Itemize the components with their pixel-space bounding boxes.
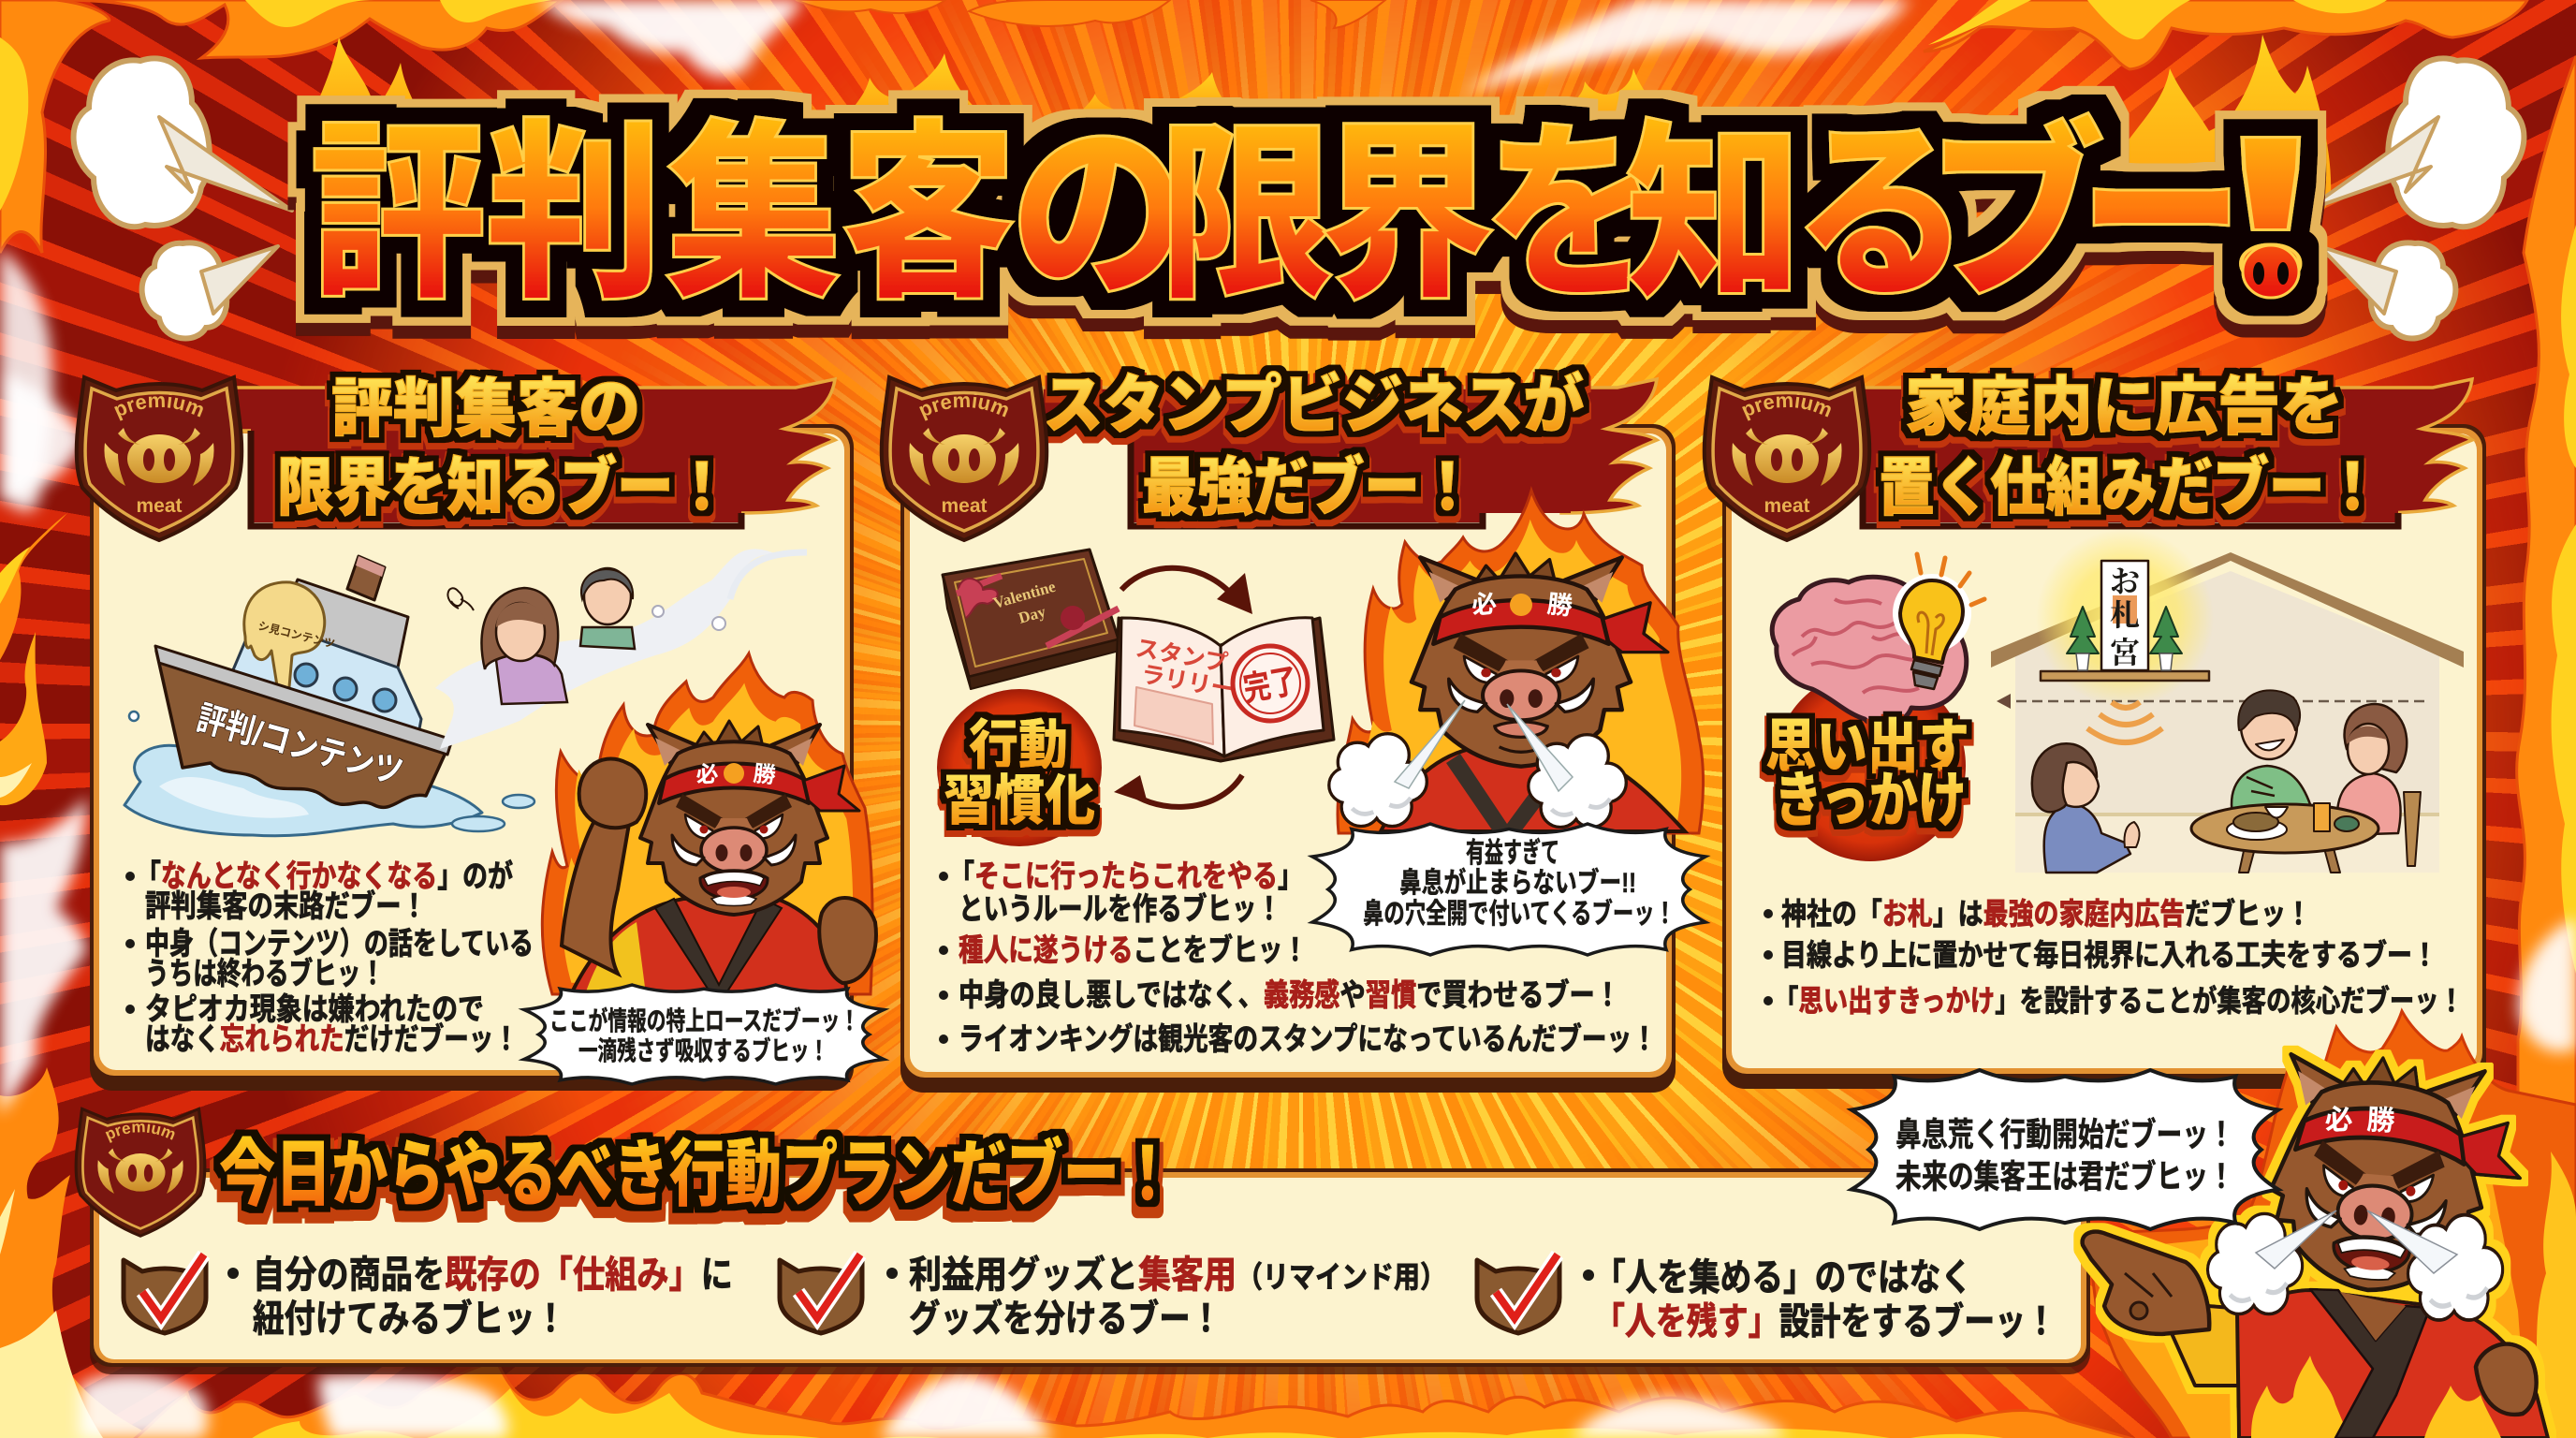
action plan card <box>90 1168 2090 1374</box>
illustration: valentine chocolate box: Day <box>1017 602 1048 627</box>
ofuda: 宮 <box>2110 636 2140 669</box>
illustration: stamp rally book <box>1114 618 1334 761</box>
illustration: sinking ship: シ見コンテンツ <box>256 619 336 651</box>
badge: premium meat: meat <box>941 495 988 517</box>
badge: premium meat: meat <box>136 495 183 517</box>
badge: premium meat: premium <box>919 395 1008 421</box>
illustration: stamp rally book: スタンプ <box>1134 635 1230 677</box>
steam: left <box>2207 1213 2303 1314</box>
badge: premium meat: premium <box>114 395 203 421</box>
panel 1 banner: 限界を知るブー！ <box>277 452 730 523</box>
panel 2 banner: 最強だブー！ <box>1142 452 1475 523</box>
character: angry boar with raised fist <box>542 653 876 994</box>
steam: right <box>2408 1215 2503 1320</box>
bullets: panel 1: はなく忘れられただけだブーッ！ <box>145 1021 519 1056</box>
speech bubble: action plan <box>1852 1070 2278 1229</box>
panel 1: reputation limits <box>75 369 921 1091</box>
icon: check <box>1477 1255 1559 1333</box>
person: woman at left <box>2032 743 2140 873</box>
speech bubble: panel 1 <box>524 985 884 1084</box>
bullets: panel 2: 中身の良し悪しではなく、義務感や習慣で買わせるブー！ <box>959 977 1620 1012</box>
arrow: book to habit <box>1114 775 1242 807</box>
action 2: グッズを分けるブー！ <box>909 1299 1222 1340</box>
speech bubble: panel 1: 一滴残さず吸収するブヒッ！ <box>578 1035 828 1065</box>
panel 1 card <box>90 424 854 1091</box>
flames: right edge <box>2517 56 2576 1438</box>
illustration: brain, bulb, remember trigger: きっかけ <box>1774 767 1967 834</box>
title flames <box>301 35 2331 234</box>
steam clouds: title right <box>2305 58 2524 338</box>
steam clouds: title left <box>74 58 292 338</box>
action 1: 紐付けてみるブヒッ！ <box>253 1299 566 1340</box>
bullets: panel 2: ライオンキングは観光客のスタンプになっているんだブーッ！ <box>959 1021 1657 1056</box>
badge: behaviour habit <box>937 689 1102 846</box>
bullets: panel 1: タピオカ現象は嫌われたので <box>145 991 484 1026</box>
speech bubble: panel 2: 鼻の穴全開で付いてくるブーッ！ <box>1363 898 1676 930</box>
badge: premium meat <box>75 374 243 543</box>
panel 3: advertising inside the home <box>1702 367 2486 1089</box>
panel 2 banner <box>1042 370 1657 526</box>
panel 2: stamp business <box>880 364 1711 1093</box>
bullets: panel 3 <box>1764 897 2464 1018</box>
illustration: valentine chocolate box: Valentine <box>991 578 1058 612</box>
ship label: 評判/コンテンツ <box>193 698 407 792</box>
badge: premium meat: premium <box>1742 395 1831 421</box>
bullets: panel 3: 「思い出すきっかけ」を設計することが集客の核心だブーッ！ <box>1774 984 2464 1018</box>
badge: behaviour habit: 行動 <box>969 715 1068 776</box>
speech bubble: action plan: 未来の集客王は君だブヒッ！ <box>1895 1158 2234 1196</box>
speech bubble: action plan: 鼻息荒く行動開始だブーッ！ <box>1895 1116 2234 1153</box>
character: pointing boar <box>2083 1049 2548 1438</box>
illustration: sinking ship <box>124 556 534 836</box>
action 1: 自分の商品を既存の「仕組み」に <box>253 1255 733 1296</box>
robe <box>2170 1289 2548 1438</box>
icon: check <box>124 1255 206 1333</box>
illustration: stamp rally book: 完了 <box>1240 661 1300 709</box>
bullets: panel 3: 目線より上に置かせて毎日視界に入れる工夫をするブー！ <box>1781 938 2437 972</box>
flames: bottom edge <box>112 1360 2190 1438</box>
badge: premium <box>76 1108 205 1236</box>
icon: check <box>780 1255 862 1333</box>
panel 3 card <box>1722 424 2486 1089</box>
illustration: home with ofuda shrine and family <box>1991 529 2464 873</box>
bullets: panel 2: 「そこに行ったらこれをやる」 <box>949 858 1303 893</box>
headband text: 必 <box>1470 589 1498 620</box>
panel 3 banner: 置く仕組みだブー！ <box>1879 452 2380 523</box>
ofuda <box>2101 561 2148 670</box>
ofuda: お <box>2110 565 2140 598</box>
steam: left <box>1329 734 1427 826</box>
panel 3 banner <box>1857 372 2472 526</box>
panel 4: action plan <box>76 1108 2090 1374</box>
speech bubble: panel 2 <box>1312 824 1705 955</box>
illustration: people forgetting in smoke <box>435 549 807 749</box>
illustration: valentine chocolate box <box>943 550 1120 689</box>
panel 1 banner: 評判集客の <box>331 374 640 445</box>
illustration: brain, bulb, remember trigger <box>1765 554 1984 861</box>
character: snorting boar: 勝 <box>1545 590 1573 621</box>
ofuda: 札 <box>2110 598 2140 632</box>
speech bubble: panel 2: 有益すぎて <box>1466 838 1559 869</box>
bullets: panel 2 <box>939 858 1657 1056</box>
bullets: panel 1: 中身（コンテンツ）の話をしている <box>145 926 534 961</box>
bullets: panel 1: 評判集客の末路だブー！ <box>145 888 427 923</box>
action 3: 「人を残す」設計をするブーッ！ <box>1594 1301 2056 1343</box>
arrow: box to book <box>1121 568 1252 614</box>
badge: premium: premium <box>105 1123 174 1143</box>
flames: top edge <box>56 0 2527 69</box>
flames: left edge <box>0 0 159 1438</box>
person: woman at table <box>2337 704 2421 866</box>
title: ー <box>2080 109 2243 322</box>
pointing hand <box>2083 1232 2209 1334</box>
action 3: 「人を集める」のではなく <box>1594 1257 1972 1299</box>
panel 1 banner <box>220 374 835 526</box>
action 1 <box>124 1255 733 1340</box>
bullets: panel 1: 「なんとなく行かなくなる」のが <box>136 858 513 893</box>
character flames: pointing boar <box>2087 1011 2576 1438</box>
bullets: panel 2: 種人に遂うけることをブヒッ！ <box>959 932 1308 967</box>
action plan heading: 今日からやるべき行動プランだブー！ <box>219 1133 1176 1215</box>
character: snorting boar <box>1329 491 1704 833</box>
character: angry boar with raised fist: 勝 <box>752 761 777 788</box>
character: pointing boar: 勝 <box>2366 1105 2395 1137</box>
badge: behaviour habit: 習慣化 <box>944 770 1095 831</box>
action 3 <box>1477 1255 2056 1343</box>
remember trigger label: 思い出す <box>1765 713 1969 781</box>
bullets: panel 1 <box>125 858 534 1056</box>
table with meal <box>2191 803 2378 873</box>
illustration: stamp rally book: ラリリー <box>1139 661 1236 703</box>
action 2: 利益用グッズと集客用（リマインド用） <box>909 1255 1446 1296</box>
bullets: panel 2: というルールを作るブヒッ！ <box>959 891 1281 926</box>
title: ！ <box>2127 108 2415 322</box>
headband text: 必 <box>695 761 722 788</box>
headband text: 必 <box>2324 1104 2353 1137</box>
steam: right <box>1529 735 1626 828</box>
badge: premium meat: meat <box>1764 495 1810 517</box>
person: man at table <box>2232 690 2312 824</box>
panel 2 card <box>900 424 1676 1093</box>
panel 2 banner: スタンプビジネスが <box>1043 370 1584 441</box>
title: 評判集客の限界を知るブ <box>310 108 2104 322</box>
speech bubble: panel 1: ここが情報の特上ロースだブーッ！ <box>549 1005 859 1035</box>
raised fist <box>2476 1344 2537 1415</box>
title exclamation: pig snout nostrils <box>2253 262 2289 285</box>
speech bubble: panel 2: 鼻息が止まらないブー!! <box>1399 867 1636 899</box>
bullets: panel 3: 神社の「お札」は最強の家庭内広告だブヒッ！ <box>1781 897 2311 931</box>
action 2 <box>780 1255 1446 1340</box>
badge: premium meat <box>1705 377 1869 540</box>
bullets: panel 1: うちは終わるブヒッ！ <box>145 956 385 990</box>
badge: premium meat <box>880 374 1048 543</box>
panel 3 banner: 家庭内に広告を <box>1905 372 2343 443</box>
